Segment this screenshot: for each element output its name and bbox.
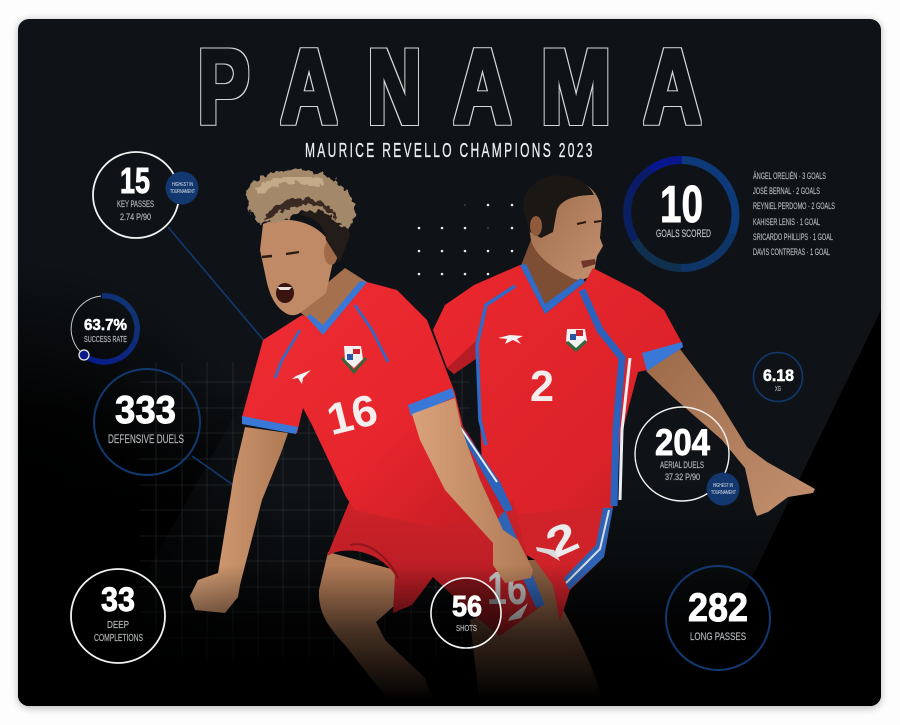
stat: success rate [71,296,137,362]
success ring [71,296,137,362]
badge: highest in tournament, aerial duels [706,472,740,506]
player 1 shorts: 16 [487,562,527,614]
player 2 neck and head [520,175,603,313]
player 1 shorts [327,500,545,636]
title [198,26,702,146]
goal scorers list: ÁNGEL ORELIÉN · 3 GOALS [753,171,826,182]
player 2 arm [646,349,815,516]
stat: shots: 56 [452,591,482,623]
badge: highest in tournament [166,172,198,204]
goals ring [627,160,735,268]
player 1 jersey [242,281,513,528]
title: M [540,26,612,146]
connector line: defensive duels [192,456,236,487]
stat: key passes: 15 [120,160,150,201]
stat: goals scored [627,160,735,268]
stat: long passes: LONG PASSES [690,631,746,643]
stat: aerial duels: AERIAL DUELS [660,460,704,470]
player 2 [433,175,815,706]
lower fade [18,565,881,706]
goal scorers list: JOSÉ BERNAL · 2 GOALS [753,186,820,197]
stat: goals scored: GOALS SCORED [656,228,711,240]
player 2 jersey [433,264,683,515]
goal scorers list: KAHISER LENIS · 1 GOAL [753,217,820,228]
stat: key passes: KEY PASSES [117,199,154,209]
player 1 jersey: 16 [322,385,382,445]
stat: defensive duels [94,369,200,475]
player 2 shorts [510,506,613,622]
player 2 shorts: 2 [539,512,585,567]
badge: highest in tournament, aerial duels: HIGHEST IN [713,483,733,489]
stat: aerial duels: 37.32 P/90 [665,472,700,482]
dot matrix [418,204,513,275]
player 1 [18,170,881,706]
player 1 neck and face [260,220,367,335]
player 1 near arm [412,398,533,583]
stat: long passes [666,566,770,670]
goal scorers list: REYNIEL PERDOMO · 2 GOALS [753,201,835,212]
stat: defensive duels: DEFENSIVE DUELS [108,432,184,446]
subtitle: MAURICE REVELLO CHAMPIONS 2023 [305,140,592,162]
stat: xG [754,352,802,402]
stat: goals scored: 10 [660,176,703,234]
stat: key passes [93,152,179,238]
stat: shots: SHOTS [456,624,477,633]
player 2 jersey: 2 [530,362,554,411]
player 1 hair [247,170,355,262]
stat: long passes: 282 [688,586,748,630]
title: A [644,26,702,146]
goal scorers list: DAVIS CONTRERAS · 1 GOAL [753,247,830,258]
stat: xG: XG [775,386,781,393]
badge: highest in tournament: TOURNAMENT [170,189,195,195]
stat: defensive duels: 333 [115,389,176,432]
player 2 crest [566,329,587,351]
stat: shots [431,578,501,648]
connector line: key passes [168,227,266,343]
goal scorers list: SRICARDO PHILLIPS · 1 GOAL [753,232,833,243]
stat: xG: 6.18 [763,366,794,385]
stat: key passes: 2.74 P/90 [120,212,151,222]
title: P [198,26,250,146]
stat: success rate: 63.7% [84,317,127,334]
stat: deep completions: DEEP [107,620,129,631]
stat: aerial duels: 204 [655,422,710,463]
player 1 legs [318,552,430,692]
player 1 crest [342,346,366,372]
stat: deep completions: COMPLETIONS [94,633,143,644]
title: A [454,26,512,146]
title: N [368,26,422,146]
badge: highest in tournament: HIGHEST IN [172,182,193,188]
stat: deep completions: 33 [101,581,135,619]
stat: deep completions [71,569,165,663]
player 2 legs [528,560,599,690]
player 1 far arm [190,427,288,613]
title: A [280,26,338,146]
stat: success rate: SUCCESS RATE [84,335,127,344]
badge: highest in tournament, aerial duels: TOURNAMENT [711,490,736,496]
goal scorers list [753,171,835,258]
stat: aerial duels [635,407,729,501]
background grid [140,362,470,660]
